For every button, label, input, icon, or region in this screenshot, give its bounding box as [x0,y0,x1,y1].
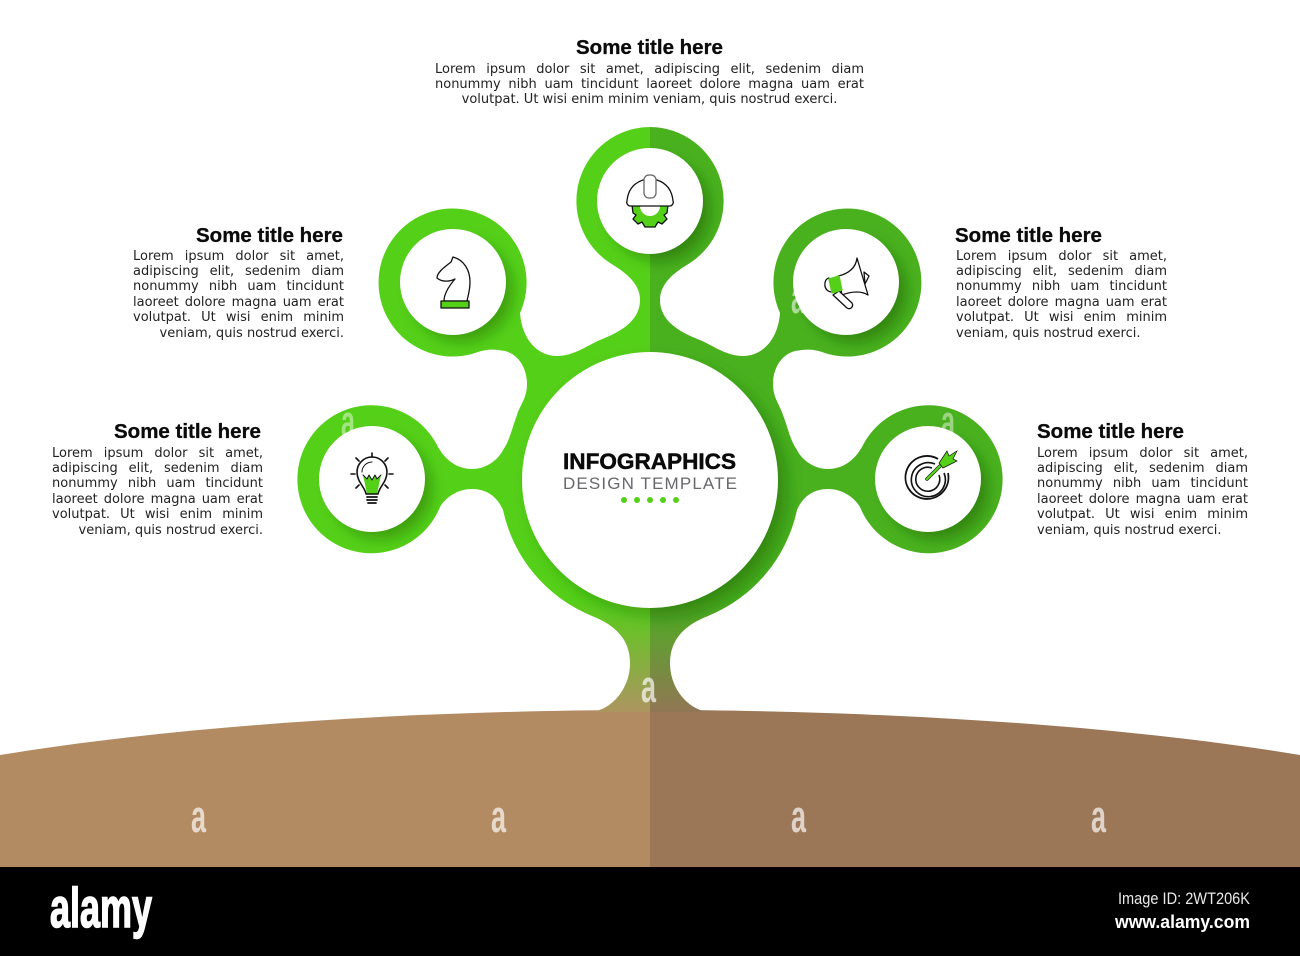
text block: top [435,62,864,107]
text block: lower right: Lorem ipsum dolor sit amet, [1037,446,1248,461]
text block: upper left: nonummy nibh uam tincidunt [133,279,344,294]
text block: upper left: adipiscing elit, sedenim diam [133,264,344,279]
node circle: upper left [400,229,506,335]
text block: lower right [1037,446,1248,538]
centre dots [621,497,679,503]
text block: upper right: Lorem ipsum dolor sit amet, [956,249,1167,264]
icon: helmet and gear [627,175,673,227]
title: lower right: Some title here [1037,420,1184,443]
centre heading [563,449,737,503]
tree shape: right half [650,127,1003,712]
text block: upper left [133,249,344,341]
text block: lower right: nonummy nibh uam tincidunt [1037,476,1248,491]
watermark marks: a [791,791,807,842]
text block: top: volutpat. Ut wisi enim minim veniam, quis nostrud exerci. [462,92,837,107]
icon: light bulb [351,453,393,503]
watermark marks: a [941,396,956,447]
watermark marks: a [791,272,806,323]
centre heading: INFOGRAPHICS [563,449,736,474]
text block: top: nonummy nibh uam tincidunt laoreet dolore magna uam erat [435,77,864,92]
text block: upper left: laoreet dolore magna uam erat [133,295,344,310]
text block: lower right: volutpat. Ut wisi enim minim [1037,507,1248,522]
icon: chess knight [437,257,470,308]
text block: lower right: laoreet dolore magna uam erat [1037,492,1248,507]
website: www.alamy.com [1114,912,1250,932]
text block: upper right: laoreet dolore magna uam erat [956,295,1167,310]
title: upper right: Some title here [955,224,1102,247]
image id: Image ID: 2WT206K [1118,889,1251,908]
text block: upper right [956,249,1167,341]
text block: top: Lorem ipsum dolor sit amet, adipiscing elit, sedenim diam [435,62,864,77]
text block: lower left: volutpat. Ut wisi enim minim [52,507,263,522]
text block: upper right: adipiscing elit, sedenim diam [956,264,1167,279]
icon: megaphone [825,258,869,309]
watermark marks: a [341,396,356,447]
node circle: top [597,148,703,254]
footer bar [0,867,1300,956]
icon: target with arrow [905,451,957,499]
centre circle [522,352,778,608]
watermark marks: a [641,661,657,712]
text block: upper right: volutpat. Ut wisi enim minim [956,310,1167,325]
text block: lower left: laoreet dolore magna uam erat [52,492,263,507]
text block: lower right: adipiscing elit, sedenim diam [1037,461,1248,476]
centre subheading: DESIGN TEMPLATE [563,474,737,493]
title: upper left: Some title here [196,224,343,247]
text block: lower left: veniam, quis nostrud exerci. [78,523,263,538]
node circle: lower left [319,426,425,532]
watermark marks [191,272,1107,842]
watermark marks: a [1091,791,1107,842]
ground [0,710,1300,867]
watermark marks: a [191,791,207,842]
text block: upper left: Lorem ipsum dolor sit amet, [133,249,344,264]
node circle: upper right [793,229,899,335]
text block: lower left: adipiscing elit, sedenim diam [52,461,263,476]
text block: upper right: veniam, quis nostrud exerci. [956,326,1140,341]
text block: upper right: nonummy nibh uam tincidunt [956,279,1167,294]
text block: lower left: nonummy nibh uam tincidunt [52,476,263,491]
title: lower left: Some title here [114,420,261,443]
node circle: lower right [875,426,981,532]
circle shadows [330,159,988,616]
watermark marks: a [491,791,507,842]
title: top: Some title here [576,36,723,59]
text block: lower left [52,446,263,538]
text block: lower left: Lorem ipsum dolor sit amet, [52,446,263,461]
text block: upper left: volutpat. Ut wisi enim minim [133,310,344,325]
text block: upper left: veniam, quis nostrud exerci. [160,326,344,341]
alamy logo: alamy [50,876,152,939]
text block: lower right: veniam, quis nostrud exerci. [1037,523,1222,538]
tree shape: left half [297,127,650,712]
